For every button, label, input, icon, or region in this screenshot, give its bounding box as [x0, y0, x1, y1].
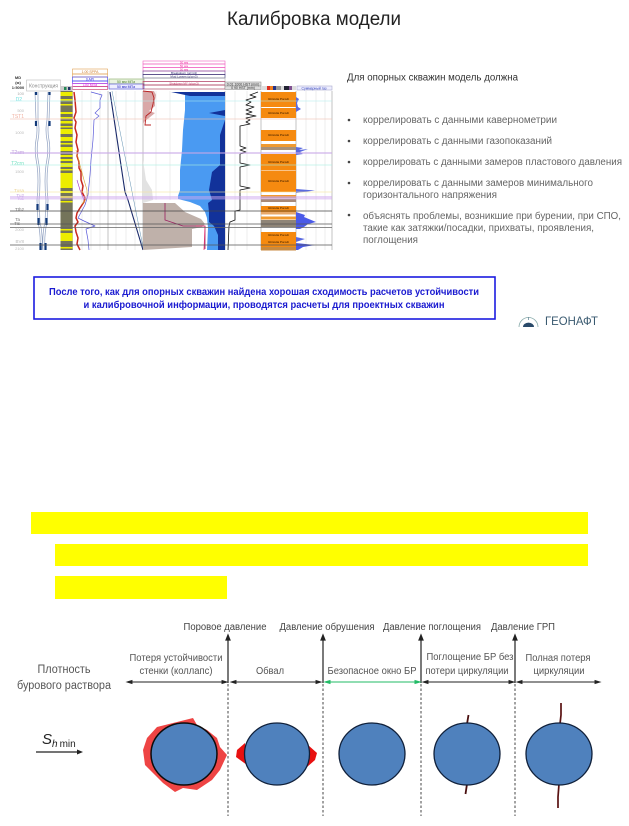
depth labels: Ta	[15, 217, 20, 222]
wellbore: breakout	[236, 723, 317, 785]
axis label: mud density	[17, 664, 112, 692]
depth labels: BV8	[15, 239, 24, 244]
orange lithology-gas track	[261, 92, 296, 250]
logo: Geonaft: ГЕОНАФТ	[545, 314, 599, 328]
title: Калибровка модели	[227, 9, 401, 30]
bullet: minimum horizontal stress: коррелировать с данными замеров минимального	[363, 178, 593, 189]
log header: depth column: 1:5000	[12, 85, 25, 90]
zone labels	[130, 651, 590, 677]
yellow highlight bars	[31, 512, 588, 599]
dark blue stability fill	[171, 92, 225, 250]
orange lithology-gas track: Glinistie Porodi	[268, 97, 289, 101]
black caliper curve track	[228, 92, 258, 250]
formation marker lines	[10, 101, 332, 245]
depth labels: 100	[17, 91, 25, 96]
orange lithology-gas track: Glinistie Porodi	[268, 160, 289, 164]
log curve headers: 50 мм	[180, 60, 188, 64]
bullet: minimum horizontal stress	[348, 178, 593, 201]
depth labels: 1000	[15, 130, 25, 135]
wellbore: full fractures	[526, 703, 592, 808]
log curve headers: 0 API	[86, 78, 94, 82]
bullet: minimum horizontal stress: горизонтального напряжения	[363, 190, 497, 201]
safe window arrow	[325, 680, 420, 684]
bullet: drilling problems: такие как затяжки/посадки, прихваты, проявления,	[363, 223, 594, 234]
casing construction schematic	[35, 92, 50, 250]
log curve headers: 50 мм МПа	[117, 80, 135, 84]
zone labels: Безопасное окно БР	[328, 666, 417, 677]
pressure axis labels	[184, 621, 555, 633]
track borders	[72, 91, 332, 250]
gas curve track	[296, 97, 316, 250]
depth labels: 1500	[15, 169, 25, 174]
log header: depth column	[12, 75, 25, 90]
depth labels: Tu2	[16, 193, 24, 198]
log curve headers: 0 90 HST (mm)	[231, 86, 255, 90]
zone labels: стенки (коллапс)	[140, 666, 212, 677]
depth labels: D2	[16, 97, 22, 103]
log curve headers: 50 мм	[180, 68, 188, 72]
stress direction arrow: S	[42, 731, 52, 748]
log curve headers: Mud Losses (g/cm3)	[170, 74, 198, 78]
log curve headers: 100 МПа	[83, 83, 97, 87]
stress direction arrow: h	[52, 739, 58, 750]
zone labels: потери циркуляции	[426, 666, 508, 677]
orange lithology-gas track: Glinistie Porodi	[268, 240, 289, 244]
depth labels: 500	[17, 108, 25, 113]
stress direction arrow: min	[60, 739, 76, 750]
stratigraphy colour strip header	[261, 86, 296, 90]
log curve headers: 50 мм	[180, 64, 188, 68]
pressure gradient lines	[110, 91, 143, 250]
grid lines	[82, 91, 325, 250]
orange lithology-gas track: Glinistie Porodi	[268, 111, 289, 115]
depth labels: Tu1	[17, 196, 25, 201]
bullet: gas: коррелировать с данными газопоказаний	[363, 136, 552, 147]
callout box: и калибровочной информации, проводятся расчеты для проектных скважин	[84, 299, 444, 311]
stress direction arrow	[36, 731, 83, 754]
gamma and resistivity curves	[74, 92, 102, 250]
log header: depth column: MD	[15, 75, 21, 80]
orange lithology-gas track: Glinistie Porodi	[268, 206, 289, 210]
well log chart panel	[10, 60, 332, 251]
callout box	[34, 277, 495, 319]
wellbore: minor fractures	[434, 715, 500, 794]
log curve headers: 50 мм МПа	[117, 85, 135, 89]
depth labels: Tusa	[14, 188, 24, 193]
axis label: mud density: бурового раствора	[17, 680, 112, 692]
right column: requirements list	[347, 72, 622, 246]
zone labels: циркуляции	[534, 666, 584, 677]
depth labels: TST1	[12, 114, 24, 120]
log header: construction: Конструкция	[29, 84, 58, 90]
bullet: caliper: коррелировать с данными кавернометрии	[363, 115, 557, 126]
dashed zone boundaries	[228, 684, 515, 816]
log curve headers: Breakdown (g/cm3)	[171, 71, 197, 75]
depth labels: T2sm	[12, 150, 24, 156]
orange lithology-gas track: Glinistie Porodi	[268, 179, 289, 183]
bullet: drilling problems: объяснять проблемы, возникшие при бурении, при СПО,	[363, 210, 621, 222]
depth labels: 2100	[15, 246, 25, 251]
log header: depth column: (м)	[15, 80, 21, 85]
wellbore stability track	[143, 91, 225, 250]
log curve headers: Суммарный газ	[301, 86, 327, 90]
vertical pressure arrows	[226, 635, 517, 683]
depth labels: T2crn	[11, 161, 24, 167]
list heading: Для опорных скважин модель должна	[347, 72, 518, 84]
orange lithology-gas track: Glinistie Porodi	[268, 233, 289, 237]
callout box: После того, как для опорных скважин найдена хорошая сходимость расчетов устойчивости	[49, 286, 479, 298]
horizontal zone arrows	[127, 680, 600, 684]
orange lithology-gas track: Glinistie Porodi	[268, 133, 289, 137]
zone labels: Полная потеря	[526, 653, 590, 664]
wellbore: safe window	[339, 723, 405, 785]
pressure axis labels: Давление поглощения	[383, 622, 481, 633]
log curve headers: 0.01 1000 HST (mm)	[227, 82, 259, 86]
pressure axis labels: Поровое давление	[184, 622, 267, 633]
light blue stability fill	[178, 92, 225, 250]
depth labels: Tth2	[15, 207, 24, 212]
logo: Geonaft	[519, 314, 599, 328]
lithology column	[60, 86, 72, 250]
wellbore: collapse	[143, 718, 227, 792]
depth labels: TS	[14, 221, 20, 226]
pressure axis labels: Давление обрушения	[280, 621, 374, 633]
wellbore failure diagram	[17, 621, 600, 816]
pressure axis labels: Давление ГРП	[491, 622, 555, 633]
zone labels: Потеря устойчивости	[130, 653, 222, 664]
axis label: mud density: Плотность	[38, 664, 90, 676]
depth labels: 2000	[15, 227, 25, 232]
log header: construction	[26, 80, 60, 91]
depth labels	[11, 91, 25, 251]
log curve headers: Shutdown MY (g/cm3)	[169, 82, 199, 86]
bullet: drilling problems: поглощения	[363, 235, 418, 246]
bullet: formation pressure: коррелировать с данными замеров пластового давления	[363, 157, 622, 168]
zone labels: Обвал	[256, 665, 284, 677]
log curve headers	[72, 60, 332, 90]
log curve headers: 1.00 SPPA	[82, 70, 99, 74]
bullet: drilling problems	[348, 210, 621, 246]
zone labels: Поглощение БР без	[426, 651, 514, 663]
